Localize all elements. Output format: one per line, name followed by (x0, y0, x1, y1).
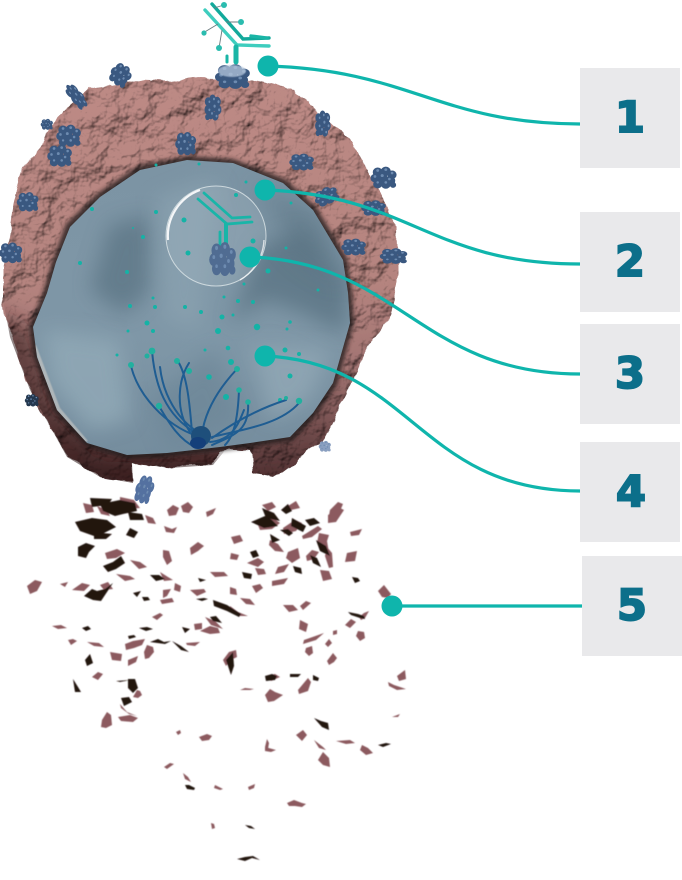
number box 1: 1 (615, 93, 645, 143)
callout lines (250, 66, 582, 606)
callout 2 line (265, 190, 580, 264)
cell membrane (0, 78, 398, 500)
cell interior (33, 160, 350, 455)
number box 1 (580, 68, 680, 168)
number box 5: 5 (617, 581, 647, 631)
antibody in vesicle (198, 193, 252, 245)
callout dots (240, 56, 402, 616)
number box 4 (580, 442, 680, 542)
callout 1 line (268, 66, 580, 124)
number box 2: 2 (615, 237, 645, 287)
number box 4: 4 (616, 467, 646, 517)
antibody (201, 2, 269, 62)
receptor bound to antibody (215, 64, 250, 89)
number box 5 (582, 556, 682, 656)
teal dots (78, 162, 320, 402)
shaded lower-left membrane (4, 306, 225, 483)
vesicle (166, 186, 266, 286)
dark inner rim (29, 156, 354, 459)
antigen cluster in vesicle (209, 242, 236, 276)
number box 2 (580, 212, 680, 312)
debris fragments (27, 497, 406, 861)
callout 3 line (250, 257, 580, 374)
receptor clusters on membrane (0, 60, 407, 506)
number box 3: 3 (615, 349, 645, 399)
callout 4 line (265, 356, 580, 491)
number box 3 (580, 324, 680, 424)
callout 5 line (392, 604, 582, 608)
nucleus with microtubules (128, 348, 302, 449)
